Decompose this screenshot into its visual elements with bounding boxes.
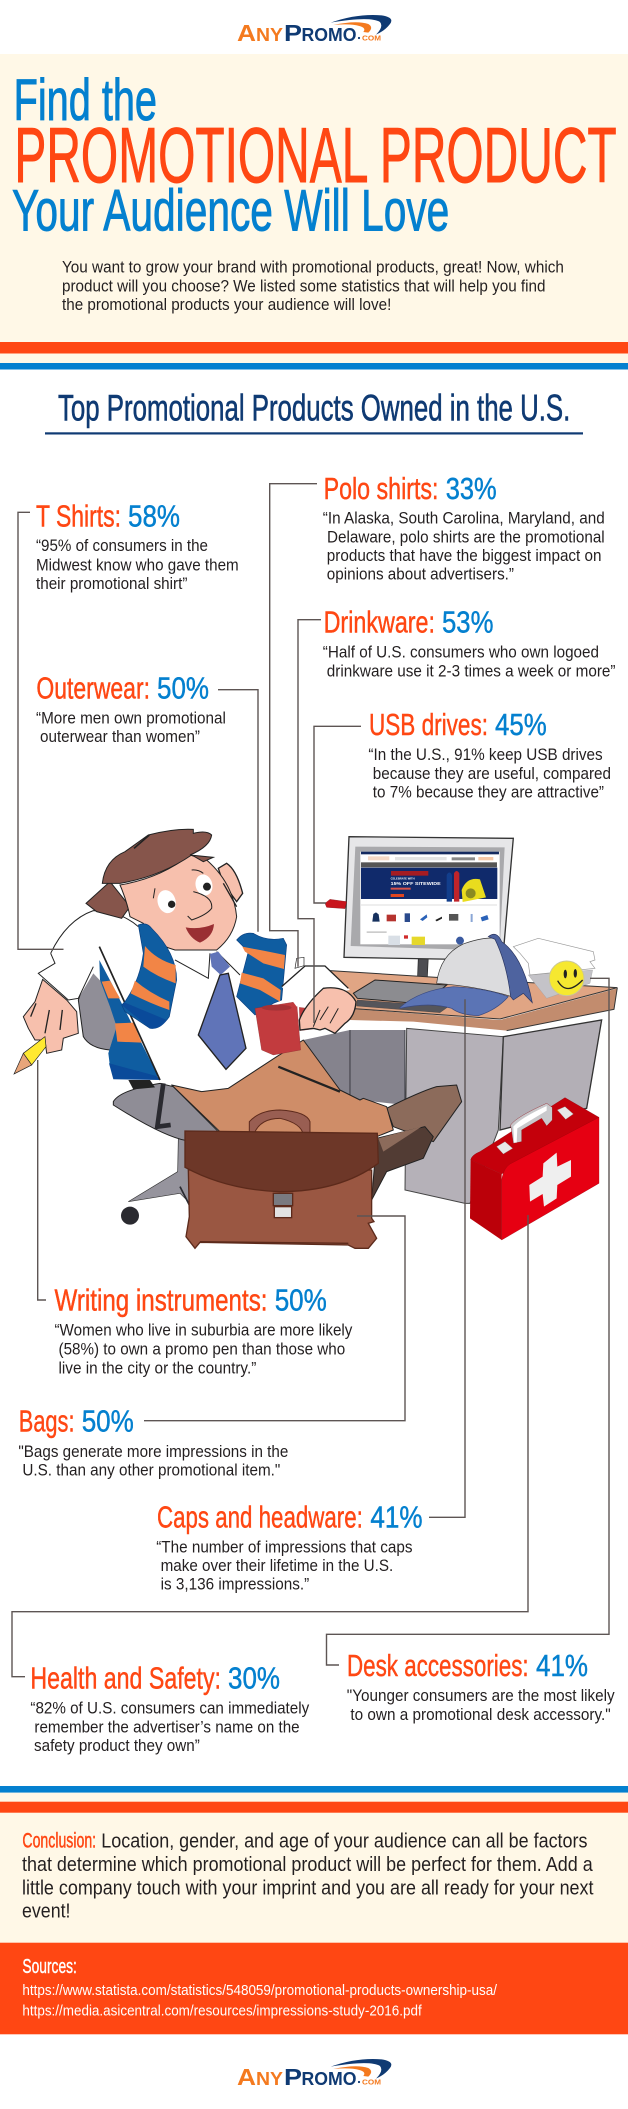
item: t shirts: T Shirts:	[36, 499, 121, 534]
item: drinkware: “Half of U.S. consumers who own logoed	[323, 644, 599, 662]
item: caps and headware: make over their lifetime in the U.S.	[161, 1557, 393, 1575]
item: outerwear: “More men own promotional	[36, 709, 226, 727]
item: usb drives	[368, 707, 611, 802]
item: health and safety: 30%	[228, 1660, 280, 1695]
connector: usb drives	[314, 726, 361, 903]
logo: AnyPromo top	[237, 15, 391, 46]
logo: AnyPromo bottom: P	[284, 2064, 302, 2090]
item: t shirts: Midwest know who gave them	[36, 556, 239, 574]
item: polo shirts: “In Alaska, South Carolina, Maryland, and	[323, 509, 605, 527]
man: upper body, head, scarf, tie	[14, 829, 301, 1087]
item: desk accessories	[347, 1648, 615, 1724]
item: polo shirts: Polo shirts:	[324, 471, 438, 506]
logo: AnyPromo top: COM	[362, 34, 381, 42]
item: outerwear: 50%	[157, 670, 209, 705]
connector: health and safety	[12, 1215, 528, 1677]
item: outerwear	[36, 670, 226, 746]
item: caps and headware: is 3,136 impressions.”	[161, 1576, 309, 1594]
connector: t shirts	[18, 512, 64, 949]
logo: AnyPromo top: NY	[256, 24, 284, 45]
item: caps and headware	[156, 1499, 422, 1594]
item: desk accessories: Desk accessories:	[347, 1648, 529, 1683]
desk top	[330, 971, 617, 1031]
logo: AnyPromo bottom: NY	[256, 2068, 284, 2089]
logo: AnyPromo top: A	[237, 20, 256, 46]
item: polo shirts: 33%	[446, 471, 497, 506]
item: t shirts: their promotional shirt”	[36, 575, 187, 593]
desk dark side	[303, 1030, 405, 1105]
item: writing instruments	[54, 1283, 353, 1377]
item: usb drives: because they are useful, compared	[373, 765, 611, 783]
panel: header background	[0, 54, 628, 363]
item: outerwear: Outerwear:	[36, 670, 150, 705]
monitor	[344, 837, 513, 984]
item: t shirts: “95% of consumers in the	[36, 537, 208, 555]
item: bags: Bags:	[19, 1404, 74, 1439]
chair	[78, 963, 220, 1225]
man: right arm, hand and mug handle	[282, 957, 356, 1033]
item: health and safety: safety product they own”	[34, 1737, 200, 1755]
cap	[400, 934, 532, 1016]
item: writing instruments: (58%) to own a promo pen than those who	[58, 1341, 345, 1359]
intro text: product will you choose? We listed some statistics that will help you find	[62, 277, 546, 295]
panel: sources	[0, 1943, 628, 2034]
item: caps and headware: Caps and headware:	[157, 1499, 363, 1534]
connector: drinkware	[298, 620, 321, 1023]
item: bags: U.S. than any other promotional item."	[22, 1462, 280, 1480]
connector: bags	[144, 1216, 405, 1421]
item: writing instruments: 50%	[275, 1283, 327, 1318]
logo: AnyPromo bottom: COM	[362, 2078, 381, 2086]
usb drive	[325, 899, 347, 909]
item: bags: 50%	[82, 1404, 134, 1439]
item: drinkware: 53%	[442, 605, 493, 640]
icon: bag	[185, 1110, 378, 1248]
item: health and safety: “82% of U.S. consumers can immediately	[30, 1699, 310, 1717]
panel: sources: Sources:	[22, 1956, 77, 1978]
item: usb drives: 45%	[495, 707, 547, 742]
item: polo shirts: Delaware, polo shirts are the promotional	[327, 528, 605, 546]
item: usb drives: to 7% because they are attractive”	[373, 784, 604, 802]
title: Your Audience Will Love	[12, 179, 449, 244]
man: trousers and shoes	[172, 1040, 462, 1200]
item: t shirts: 58%	[128, 499, 180, 534]
item: desk accessories: "Younger consumers are the most likely	[347, 1687, 615, 1705]
icon: first aid kit	[470, 1098, 599, 1240]
item: drinkware: Drinkware:	[324, 605, 435, 640]
monitor: CELEBRATE WITH	[391, 877, 415, 881]
item: health and safety: Health and Safety:	[30, 1660, 221, 1695]
item: polo shirts: opinions about advertisers.”	[327, 566, 514, 584]
item: bags	[18, 1404, 288, 1480]
item: writing instruments: “Women who live in suburbia are more likely	[54, 1322, 353, 1340]
connector: outerwear	[218, 690, 258, 932]
logo: AnyPromo bottom	[237, 2059, 391, 2090]
panel: sources: https://www.statista.com/statistics/548059/promotional-products-ownership-usa/	[22, 1982, 498, 1999]
item: caps and headware: 41%	[370, 1499, 422, 1534]
illustration: man at desk with promotional products	[14, 829, 617, 1248]
item: health and safety: remember the advertiser’s name on the	[34, 1718, 300, 1736]
logo: AnyPromo top: P	[284, 20, 302, 46]
logo: AnyPromo bottom: ROMO	[302, 2068, 356, 2089]
panel: conclusion	[22, 1830, 594, 1923]
item: drinkware	[323, 605, 616, 681]
panel: conclusion: Conclusion:	[22, 1830, 96, 1853]
logo: AnyPromo bottom: A	[237, 2064, 256, 2090]
connector: caps	[429, 999, 465, 1517]
item: polo shirts	[323, 471, 605, 584]
item: writing instruments: live in the city or the country.”	[58, 1359, 256, 1377]
item: usb drives: “In the U.S., 91% keep USB drives	[368, 746, 603, 764]
title: Find the	[14, 68, 157, 133]
keyboard	[353, 980, 448, 1013]
intro text	[62, 259, 564, 314]
panel: conclusion: event!	[22, 1900, 70, 1923]
connector: writing instruments	[38, 1060, 46, 1300]
connector: desk accessories	[326, 978, 609, 1665]
item: polo shirts: products that have the biggest impact on	[327, 547, 602, 565]
papers and smiley desk accessories	[513, 938, 595, 998]
intro text: the promotional products your audience will love!	[62, 296, 391, 314]
item: health and safety	[30, 1660, 310, 1755]
item: outerwear: outerwear than women”	[40, 728, 200, 746]
item: usb drives: USB drives:	[369, 707, 488, 742]
monitor: 15% OFF SITEWIDE	[391, 881, 441, 887]
item: caps and headware: “The number of impressions that caps	[156, 1538, 412, 1556]
item: t shirts	[36, 499, 239, 593]
title	[12, 68, 617, 244]
item: bags: "Bags generate more impressions in the	[18, 1443, 288, 1461]
logo: AnyPromo top: ROMO	[302, 24, 356, 45]
item: writing instruments: Writing instruments:	[54, 1283, 268, 1318]
desk pedestal	[405, 1020, 602, 1203]
item: desk accessories: to own a promotional desk accessory."	[350, 1706, 611, 1724]
connector: polo shirts	[270, 484, 317, 967]
panel: sources: https://media.asicentral.com/resources/impressions-study-2016.pdf	[22, 2003, 422, 2020]
intro text: You want to grow your brand with promotional products, great! Now, which	[62, 259, 564, 277]
item: desk accessories: 41%	[536, 1648, 588, 1683]
